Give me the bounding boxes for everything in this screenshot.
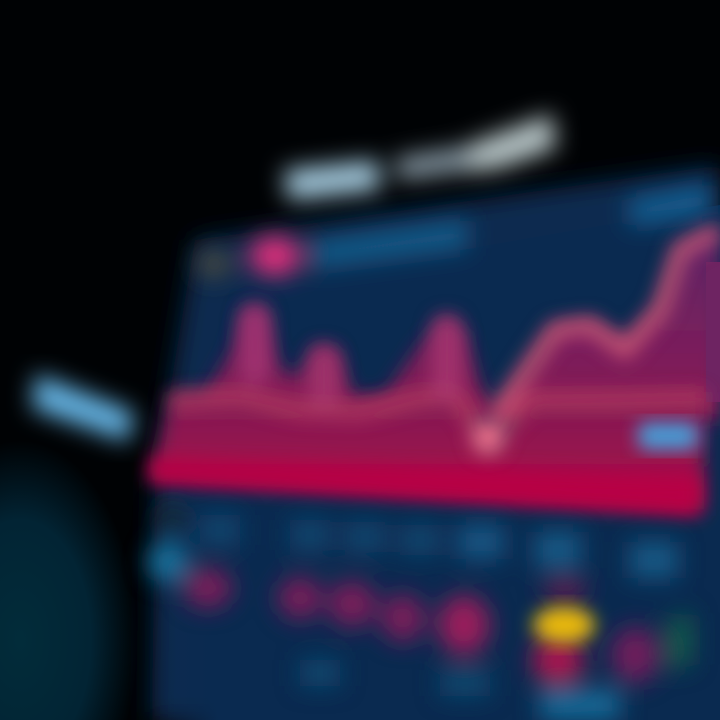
line series highlight: [175, 234, 712, 455]
panel: dashboard screen: [150, 165, 720, 720]
side label: blue tag: [32, 374, 134, 442]
background glow: lower left teal: [0, 430, 150, 720]
area chart: crimson band: [150, 390, 704, 510]
area chart: bright baseline: [150, 458, 700, 516]
legend: swatches and caption: [196, 184, 710, 278]
calendar grid: lower table of cells: [148, 504, 692, 720]
middle row: magenta cells: [184, 568, 659, 684]
area chart: upper series: [205, 225, 720, 420]
chart badge: blue value tag: [638, 422, 698, 450]
heading: pale title text: [284, 114, 556, 200]
bottom row: blue cells: [300, 660, 620, 720]
highlight cell: yellow marker: [533, 606, 595, 644]
top row: blue cells: [200, 515, 678, 578]
